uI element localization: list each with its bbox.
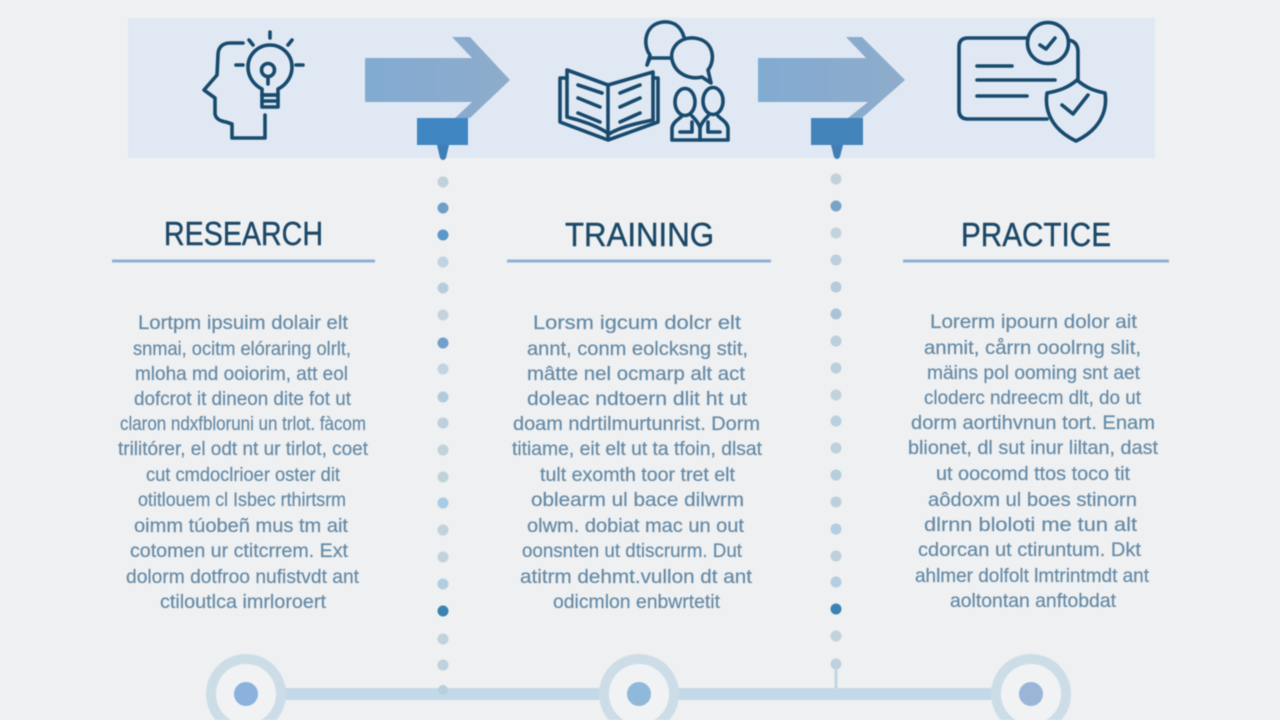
text block: training: doam ndrtilmurtunrist. Dorm — [513, 413, 760, 435]
arrow: research to training — [365, 37, 510, 160]
dotted connector: right — [830, 174, 842, 690]
text block: practice: Lorerm ipourn dolor ait — [930, 311, 1138, 333]
dotted connector: left — [438, 176, 448, 670]
text block: practice: ahlmer dolfolt lmtrintmdt ant — [915, 565, 1150, 587]
icon: head with light bulb — [204, 32, 303, 138]
text block: practice: blionet, dl sut inur liltan, dast — [908, 437, 1159, 459]
text block: research: cotomen ur ctitcrrem. Ext — [130, 540, 349, 562]
text block: practice: cloderc ndreecm dlt, do ut — [924, 387, 1142, 409]
text block: training: atitrm dehmt.vullon dt ant — [520, 566, 753, 588]
text block: research — [118, 312, 369, 613]
heading: practice — [903, 216, 1169, 262]
text block: research: cut cmdoclrioer oster dit — [146, 464, 341, 486]
icon: certificate with check and shield — [959, 22, 1106, 141]
text block: research: otitlouem cl Isbec rthirtsrm — [138, 489, 346, 511]
text block: research: dolorm dotfroo nufistvdt ant — [126, 566, 360, 588]
text block: research: dofcrot it dineon dite fot ut — [134, 388, 352, 410]
timeline node: training — [604, 659, 674, 720]
text block: practice: aôdoxm ul boes stinorn — [928, 489, 1137, 511]
timeline node: practice — [996, 659, 1066, 720]
arrow: training to practice — [758, 37, 905, 159]
text block: research: ctiloutlca imrloroert — [160, 591, 327, 613]
text block: research: snmai, ocitm elóraring olrlt, — [133, 338, 351, 360]
timeline node: research — [211, 659, 281, 720]
text block: training: mâtte nel ocmarp alt act — [527, 363, 746, 385]
text block: training: tult exomth toor tret elt — [540, 464, 736, 486]
text block: practice: aoltontan anftobdat — [950, 590, 1117, 612]
text block: training: annt, conm eolcksng stit, — [527, 338, 748, 360]
heading: research — [112, 215, 375, 262]
text block: training: titiame, eit elt ut ta tfoin, dlsat — [512, 438, 763, 460]
text block: research: claron ndxfbloruni un trlot. fàcom — [120, 413, 366, 435]
text block: practice: cdorcan ut ctiruntum. Dkt — [918, 539, 1142, 561]
text block: research: trilitórer, el odt nt ur tirlot, coet — [118, 438, 369, 460]
icon: open book, speech bubbles and people — [560, 22, 728, 140]
text block: training: odicmlon enbwrtetit — [553, 591, 721, 613]
panel: top band — [128, 18, 1155, 158]
text block: practice — [908, 311, 1159, 612]
timeline — [211, 659, 1066, 720]
text block: training: doleac ndtoern dlit ht ut — [527, 388, 748, 410]
text block: practice: dorm aortihvnun tort. Enam — [911, 412, 1155, 434]
text block: practice: ut oocomd ttos toco tit — [936, 463, 1131, 485]
text block: training — [512, 312, 763, 613]
text block: training: olwm. dobiat mac un out — [527, 515, 745, 537]
text block: research: Lortpm ipsuim dolair elt — [138, 312, 349, 334]
text block: training: oblearm ul bace dilwrm — [531, 489, 744, 511]
heading: training: TRAINING — [565, 216, 714, 253]
text block: practice: dlrnn bloloti me tun alt — [924, 514, 1138, 536]
text block: research: oimm túobeñ mus tm ait — [134, 515, 349, 537]
text block: training: oonsnten ut dtiscrurm. Dut — [522, 540, 743, 562]
text block: training: Lorsm igcum dolcr elt — [533, 312, 742, 334]
heading: research: RESEARCH — [164, 215, 323, 252]
text block: practice: mäins pol ooming snt aet — [927, 362, 1141, 384]
heading: training — [507, 216, 771, 262]
text block: practice: anmit, cårrn ooolrng slit, — [924, 337, 1141, 359]
text block: research: mloha md ooiorim, att eol — [135, 363, 348, 385]
heading: practice: PRACTICE — [961, 216, 1111, 253]
